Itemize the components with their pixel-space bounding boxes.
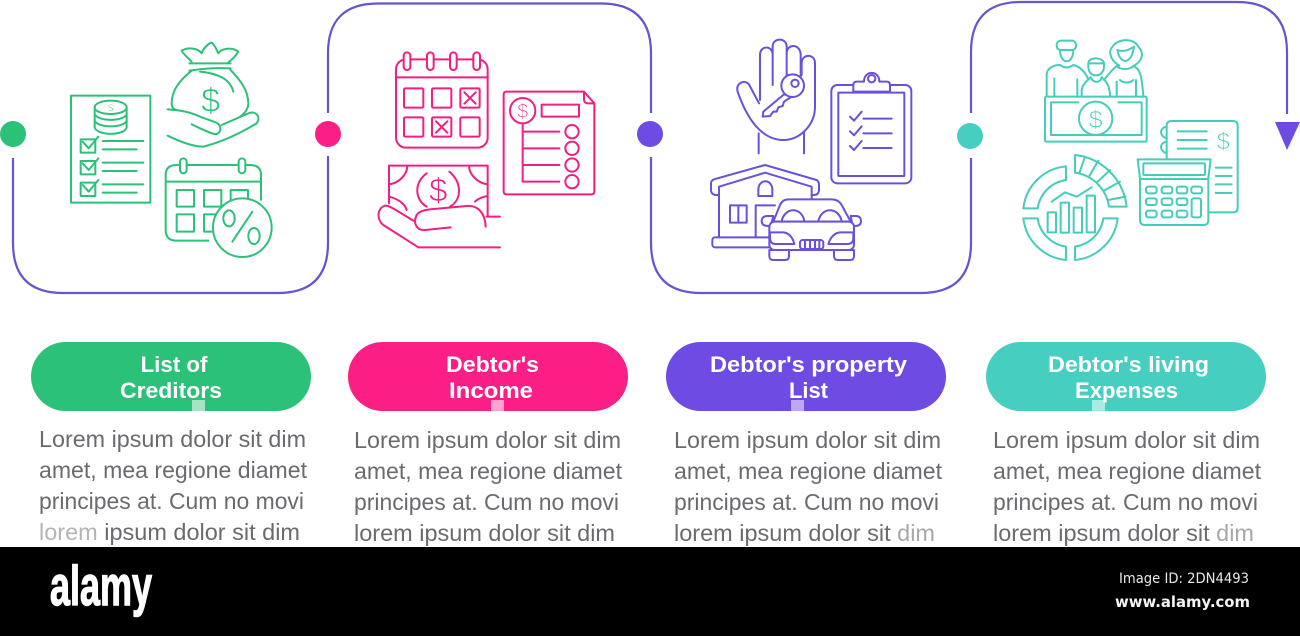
footer band with watermark: www.alamy.com [1115,593,1250,611]
panel: Debtor's Income heading: Debtor's [446,352,539,377]
text block: expenses description: Lorem ipsum dolor sit dim [993,427,1260,453]
panel: Debtor's living Expenses heading: Debtor's living [1048,352,1209,377]
icon group: hand with key, clipboard, house and car [711,40,911,260]
text block: property description: lorem ipsum dolor sit dim [674,520,935,546]
text block: income description: lorem ipsum dolor sit dim [354,520,615,546]
panel: List of Creditors heading: Creditors [120,378,222,403]
step marker: teal [957,123,983,149]
footer band with watermark: alamy [50,554,152,617]
step marker: pink [315,121,341,147]
text block: property description: Lorem ipsum dolor sit dim [674,427,941,453]
icon group: creditors list, money bag and calendar [71,43,272,257]
icon group: income calendar, statement and cash in hand [379,52,594,247]
panel: Debtor's Income heading: Income [449,378,533,403]
icon group: income calendar, statement and cash in hand: $ [517,101,528,123]
text block: income description: amet, mea regione diamet [354,458,623,484]
text block: creditors description [39,426,308,545]
panel: List of Creditors heading: List of [140,352,208,377]
arrow: end of timeline [1275,122,1300,150]
text block: expenses description: lorem ipsum dolor sit dim [993,520,1254,546]
icon group: family, banknote, donut chart, calculator: $ [1217,128,1230,155]
icon group: creditors list, money bag and calendar: $ [108,102,114,114]
icon group: creditors list, money bag and calendar: $ [201,82,220,120]
text block: creditors description: lorem ipsum dolor sit dim [39,519,300,545]
text block: creditors description: Lorem ipsum dolor sit dim [39,426,306,452]
text block: expenses description [993,427,1262,546]
icon group: family, banknote, donut chart, calculator: $ [1089,106,1103,134]
text block: property description: principes at. Cum no movi [674,489,939,515]
panel: Debtor's property List heading [666,342,946,411]
step marker: purple [637,121,663,147]
panel: List of Creditors heading [31,342,311,411]
text block: income description: principes at. Cum no movi [354,489,619,515]
text block: creditors description: principes at. Cum no movi [39,488,304,514]
text block: expenses description: principes at. Cum no movi [993,489,1258,515]
icon group: family, banknote, donut chart, calculator [1023,40,1238,260]
footer band with watermark: Image ID: 2DN4493 [1119,571,1249,587]
panel: Debtor's living Expenses heading [986,342,1266,411]
text block: expenses description: amet, mea regione diamet [993,458,1262,484]
footer band with watermark [0,547,1300,636]
panel: Debtor's property List heading: Debtor's property [710,352,907,377]
panel: Debtor's property List heading: List [789,378,828,403]
text block: creditors description: amet, mea regione diamet [39,457,308,483]
icon group: income calendar, statement and cash in hand: $ [429,173,448,210]
step marker: green [0,121,26,147]
text block: income description [354,427,623,546]
panel: Debtor's living Expenses heading: Expenses [1075,378,1178,403]
text block: property description: amet, mea regione diamet [674,458,943,484]
text block: property description [674,427,943,546]
timeline connector line [13,2,1287,293]
text block: income description: Lorem ipsum dolor sit dim [354,427,621,453]
panel: Debtor's Income heading [348,342,628,411]
